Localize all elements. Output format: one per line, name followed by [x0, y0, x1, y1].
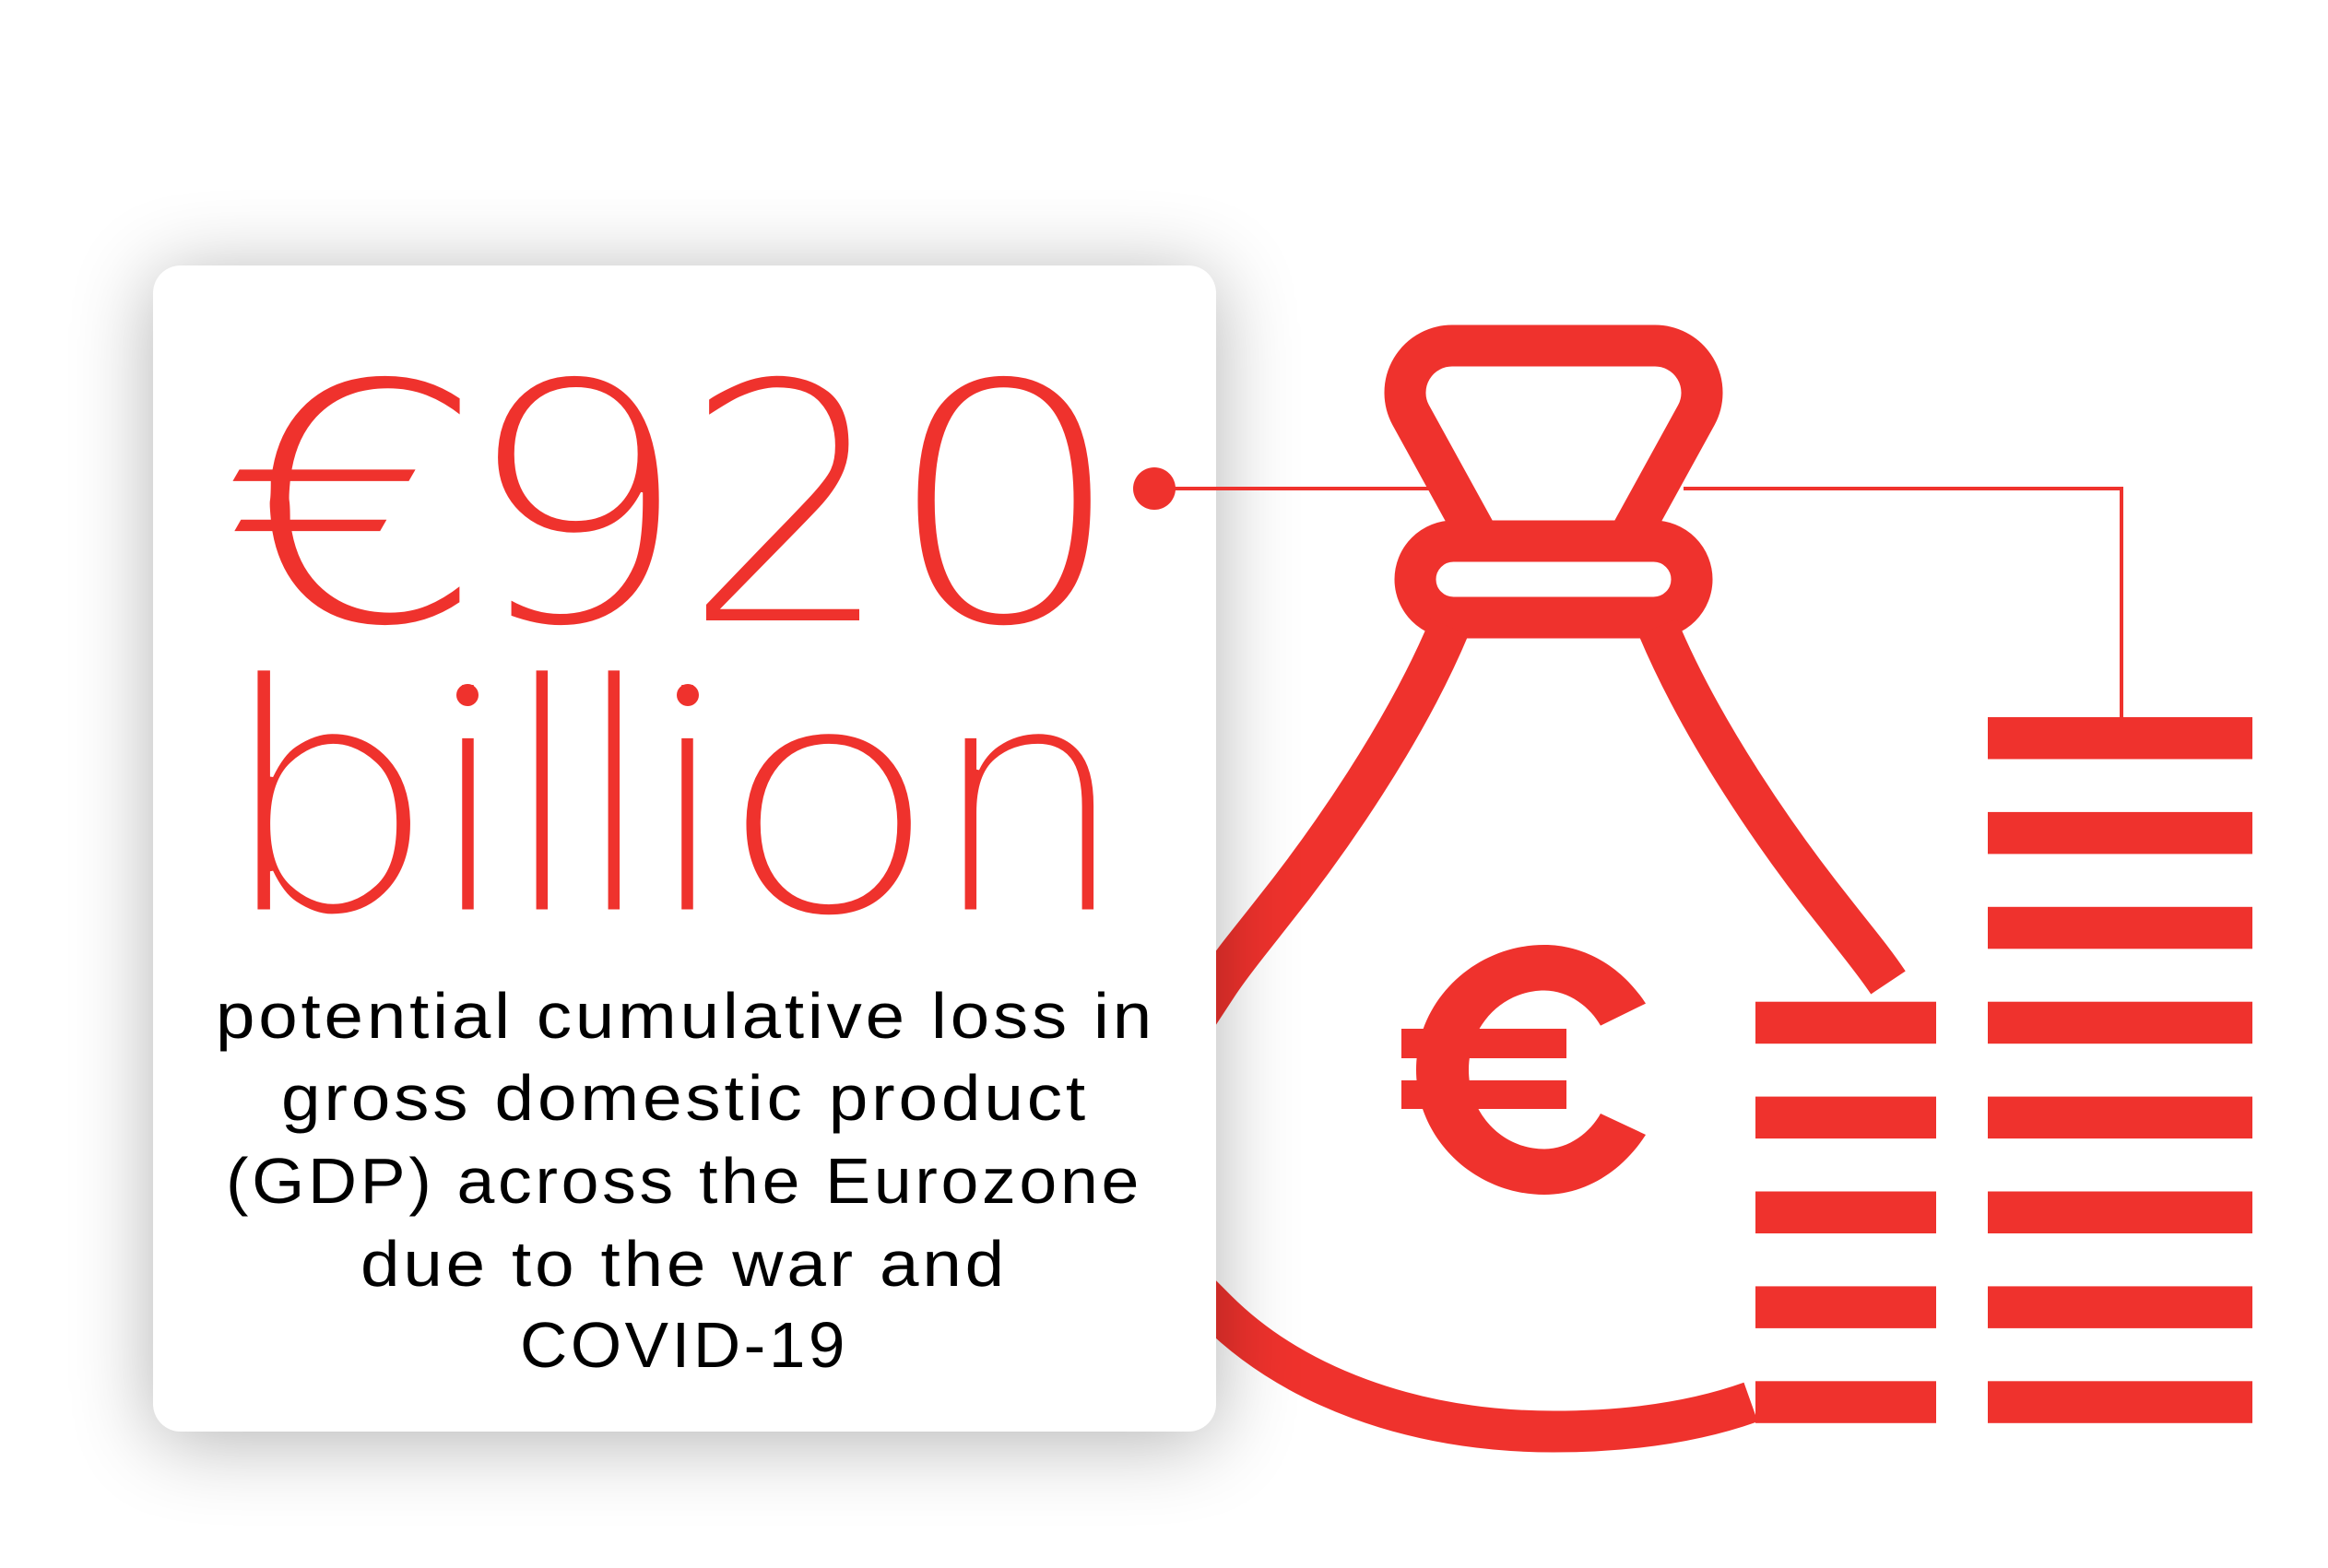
bag knot loop: [1405, 346, 1702, 544]
big number: €920: €: [219, 313, 488, 700]
icon: short coin stack: [1755, 1002, 1936, 1423]
bag right side: [1658, 627, 1888, 983]
icon: euro symbol on bag: [1401, 945, 1646, 1195]
big word: billion: o: [715, 617, 941, 986]
description text: gross domestic product: [281, 1062, 1089, 1134]
connector: dot and line from number to bag: [1133, 467, 1430, 510]
big word: billion: l: [571, 617, 659, 986]
big word: billion: i: [644, 617, 733, 986]
description text: (GDP) across the Eurozone: [226, 1145, 1142, 1217]
big number: €920: 0: [882, 313, 1128, 700]
icon: tall coin stack: [1988, 717, 2252, 1423]
big number: €920: [219, 313, 1128, 700]
description text: potential cumulative loss in: [216, 980, 1155, 1052]
connector: line from bag to coin stack: [1684, 489, 2121, 719]
big word: billion: [216, 617, 1129, 986]
big word: billion: l: [499, 617, 587, 986]
round dots on the letters i: [452, 659, 704, 706]
panel: white statistic card: [153, 265, 1216, 1432]
big number: €920: 2: [682, 313, 893, 700]
icon: money bag: [1162, 346, 1888, 1432]
big word: billion: i: [425, 617, 514, 986]
description text: [216, 980, 1155, 1381]
big number: €920: 9: [462, 313, 691, 700]
description text: due to the war and: [360, 1228, 1008, 1300]
bag left side: [1180, 627, 1449, 1042]
bag bottom curve: [1162, 1256, 1751, 1432]
bag tie band: [1415, 541, 1692, 618]
big word: billion: b: [216, 617, 440, 986]
description text: COVID-19: [520, 1309, 848, 1381]
big word: billion: n: [928, 617, 1129, 986]
